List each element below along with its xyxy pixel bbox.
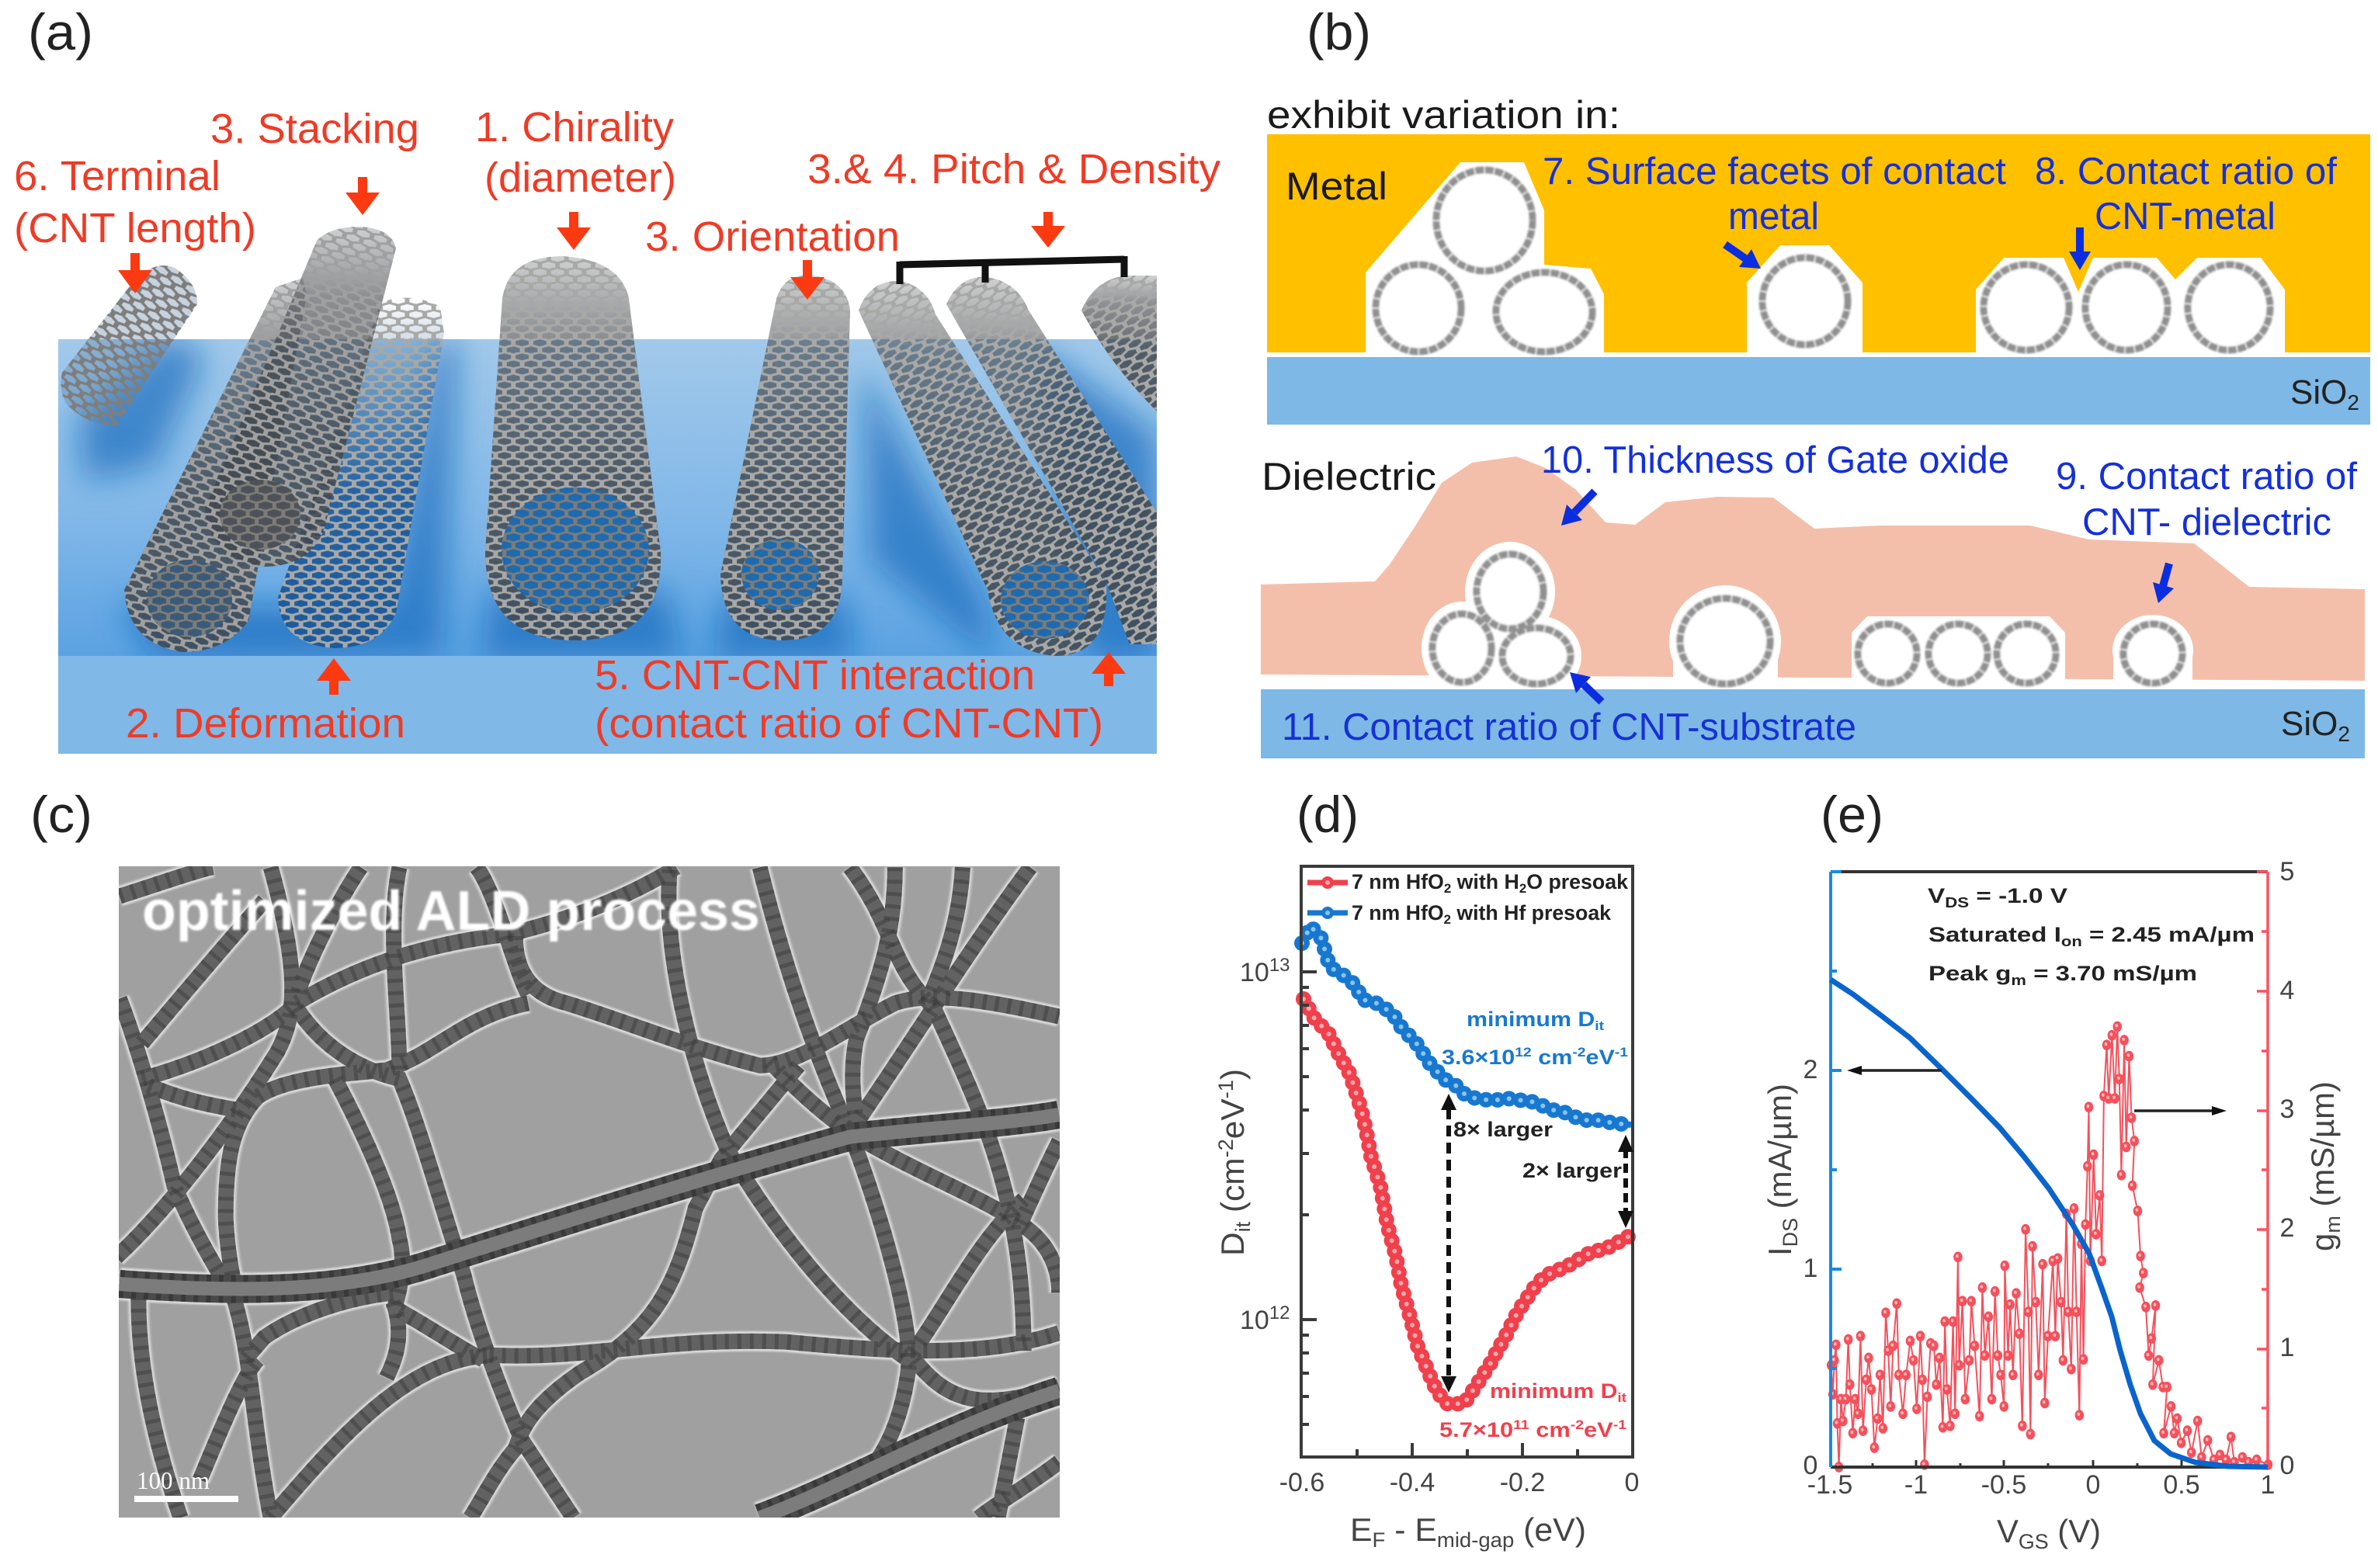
right tick labels: 4 <box>2280 976 2294 1005</box>
tube: chirality large-diameter CNT <box>485 256 661 640</box>
x axis title: F <box>1373 1528 1385 1552</box>
micrograph background <box>119 866 1060 1518</box>
red curve <box>1304 999 1631 1404</box>
blue annotation: -1 <box>1615 1045 1628 1060</box>
panel label: b: (b) <box>1307 3 1371 61</box>
y axis title left: DS <box>1779 1218 1802 1247</box>
measurement annotation: V <box>1928 884 1942 907</box>
panel d: Dit chart <box>1214 866 1639 1552</box>
y axis title left: (mA/µm) <box>1762 1084 1798 1218</box>
panel label: e: (e) <box>1821 786 1883 843</box>
tube: terminal short CNT <box>61 265 197 425</box>
y axis title right: (mS/µm) <box>2304 1081 2341 1216</box>
scale bar: 100 nm <box>137 1466 210 1494</box>
measurement annotation: DS <box>1945 895 1969 911</box>
blue labels dielectric: CNT- dielectric <box>2082 501 2331 543</box>
panel label: d: (d) <box>1297 786 1359 843</box>
dashed arrow 8x: 8× larger <box>1453 1118 1554 1141</box>
left tick labels <box>1803 1055 1817 1480</box>
panel a: nanotube variation illustration <box>14 104 1220 754</box>
red annotation: 11 <box>1513 1417 1529 1432</box>
legend: with H <box>1451 870 1519 893</box>
arrow to left axis <box>1847 1066 1942 1075</box>
x axis title: V <box>1997 1513 2019 1549</box>
legend: 2 <box>1444 881 1451 896</box>
red arrows <box>118 177 1126 695</box>
left tick labels: 0 <box>1803 1451 1817 1480</box>
substrate plane <box>58 334 1157 754</box>
blue labels dielectric: 11. Contact ratio of CNT-substrate <box>1282 706 1856 748</box>
bottom tick labels <box>1807 1470 2275 1500</box>
red annotation: cm <box>1529 1418 1571 1441</box>
red annotation: eV <box>1584 1418 1613 1441</box>
blue curve <box>1302 926 1631 1125</box>
y tick labels: 10 <box>1240 958 1269 987</box>
x tick labels: 0 <box>1625 1468 1639 1497</box>
tube: orientation CNT <box>720 276 850 640</box>
panel label: c: (c) <box>30 786 92 843</box>
measurement annotation: = 2.45 mA/µm <box>2082 923 2255 946</box>
metal SiO2 substrate: 2 <box>2347 390 2359 415</box>
blue labels metal: 8. Contact ratio of <box>2035 151 2337 193</box>
blue labels dielectric <box>1282 439 2357 748</box>
right tick labels: 1 <box>2280 1333 2294 1362</box>
red labels: 2. Deformation <box>126 700 405 747</box>
y tick labels: 12 <box>1269 1303 1290 1323</box>
blue annotation: 3.6×10 <box>1442 1046 1506 1069</box>
y axis title: it <box>1231 1221 1255 1232</box>
blue labels metal <box>1543 151 2337 238</box>
IDS blue curve <box>1831 980 2268 1467</box>
y axis title right: g <box>2304 1233 2341 1251</box>
metal label: Metal <box>1286 165 1387 208</box>
x axis title: (V) <box>2049 1513 2101 1549</box>
left axis blue <box>1831 872 1842 1467</box>
arrow to right axis <box>2134 1106 2227 1115</box>
blue annotation <box>1442 1008 1628 1069</box>
right tick labels: 0 <box>2280 1451 2294 1480</box>
bottom tick labels: 1 <box>2261 1470 2275 1500</box>
y axis title: -2 <box>1214 1139 1238 1157</box>
measurement annotation: = 3.70 mS/µm <box>2026 962 2197 985</box>
tube: right CNT under stack <box>278 298 444 648</box>
x tick labels: -0.6 <box>1279 1468 1324 1497</box>
measurement annotation: = -1.0 V <box>1969 884 2067 907</box>
y tick labels: 10 <box>1240 1306 1269 1335</box>
right axis red <box>2257 872 2268 1467</box>
measurement annotation: Saturated I <box>1928 923 2037 946</box>
blue labels dielectric: 10. Thickness of Gate oxide <box>1541 439 2009 481</box>
right tick labels <box>2280 857 2294 1480</box>
red labels: (CNT length) <box>14 205 256 252</box>
red annotation <box>1439 1379 1626 1441</box>
blue annotation: it <box>1595 1018 1604 1033</box>
blue labels metal: CNT-metal <box>2095 196 2276 238</box>
right tick labels: 3 <box>2280 1094 2294 1124</box>
heading: exhibit variation in: <box>1267 93 1620 137</box>
red labels: 3. Orientation <box>645 213 900 260</box>
dashed arrow 2x <box>1522 1135 1633 1228</box>
x axis title: E <box>1350 1511 1372 1548</box>
red annotation: -2 <box>1571 1417 1584 1432</box>
dielectric layer <box>1261 456 2365 697</box>
x axis title: (eV) <box>1514 1511 1586 1548</box>
panel c: TEM micrograph of nanotube network <box>116 866 1060 1518</box>
red annotation: minimum D <box>1490 1379 1604 1403</box>
y axis title: ) <box>1214 1069 1251 1080</box>
bottom tick labels: -1.5 <box>1807 1470 1852 1500</box>
legend: 7 nm HfO <box>1352 901 1445 924</box>
y tick labels <box>1240 955 1290 1335</box>
y axis title left: I <box>1762 1247 1798 1256</box>
red labels: 6. Terminal <box>14 153 220 199</box>
red labels: (diameter) <box>484 154 676 201</box>
bottom tick labels: -0.5 <box>1981 1470 2026 1500</box>
red annotation: it <box>1617 1390 1626 1405</box>
legend: 2 <box>1519 881 1526 896</box>
metal CNT cross-sections <box>1376 170 2270 352</box>
legend: 2 <box>1444 912 1451 927</box>
blue arrows <box>1561 227 2174 702</box>
y axis title: (cm <box>1214 1157 1251 1222</box>
bottom ticks <box>1873 1460 2225 1467</box>
dielectric SiO2 substrate: 2 <box>2338 722 2350 746</box>
top and bottom axis <box>1831 872 2268 1467</box>
y tick labels: 13 <box>1269 955 1290 976</box>
scale bar <box>134 1473 238 1502</box>
blue annotation: cm <box>1532 1046 1572 1069</box>
legend: O presoak <box>1526 870 1629 893</box>
measurement annotation: on <box>2061 934 2082 949</box>
red labels <box>14 104 1220 747</box>
panel e: transfer characteristics chart <box>1762 857 2345 1553</box>
left tick labels: 1 <box>1803 1254 1817 1283</box>
red labels: 5. CNT-CNT interaction <box>595 652 1035 699</box>
red labels: 1. Chirality <box>475 104 674 151</box>
metal SiO2 substrate: SiO <box>2290 373 2347 411</box>
red annotation: 5.7×10 <box>1439 1418 1504 1441</box>
x axis title: mid-gap <box>1437 1528 1514 1552</box>
measurement annotation <box>1928 884 2255 988</box>
blue labels metal: 7. Surface facets of contact <box>1543 151 2006 193</box>
metal SiO2 substrate <box>1267 357 2370 425</box>
measurement annotation: m <box>2011 973 2026 988</box>
legend <box>1307 870 1629 927</box>
blue annotation: -2 <box>1572 1045 1586 1060</box>
legend: 7 nm HfO <box>1352 870 1445 893</box>
red labels: 3.& 4. Pitch & Density <box>807 146 1220 193</box>
x tick labels: -0.4 <box>1390 1468 1435 1497</box>
x axis title: - E <box>1385 1511 1437 1548</box>
tube: stacked CNT <box>205 227 396 567</box>
y axis title: D <box>1214 1233 1251 1256</box>
panel label: a: (a) <box>28 3 93 61</box>
red labels: (contact ratio of CNT-CNT) <box>595 700 1103 747</box>
y axis title: eV <box>1214 1098 1251 1139</box>
measurement annotation: Peak g <box>1928 962 1996 985</box>
dashed arrow 2x: 2× larger <box>1522 1159 1623 1182</box>
bottom tick labels: 0 <box>2086 1470 2100 1500</box>
tube: deformed left CNT <box>124 278 307 652</box>
panel b: metal and dielectric contact schematic <box>1261 93 2370 758</box>
blue labels metal: metal <box>1728 196 1819 238</box>
x tick labels <box>1279 1468 1639 1497</box>
dashed arrow 8x <box>1441 1094 1554 1393</box>
axes frame and ticks <box>1301 866 1633 1457</box>
blue labels dielectric: 9. Contact ratio of <box>2056 456 2357 498</box>
legend: with Hf presoak <box>1451 901 1612 924</box>
bottom tick labels: -1 <box>1904 1470 1928 1500</box>
dielectric label: Dielectric <box>1262 455 1436 498</box>
dielectric SiO2 substrate <box>1261 689 2365 758</box>
left tick labels: 2 <box>1803 1055 1817 1084</box>
nanotube network <box>116 867 1059 1518</box>
dielectric SiO2 substrate: SiO <box>2281 705 2338 743</box>
tubes: pitch and density CNT array <box>859 276 1157 656</box>
gm noisy red data <box>1831 1026 2268 1467</box>
pitch bracket <box>900 256 1124 284</box>
x axis title: GS <box>2019 1530 2049 1553</box>
metal layer <box>1267 134 2370 352</box>
right tick labels: 5 <box>2280 857 2294 886</box>
y axis title: -1 <box>1214 1080 1238 1098</box>
red annotation: -1 <box>1613 1417 1626 1432</box>
bottom tick labels: 0.5 <box>2163 1470 2200 1500</box>
micrograph title: optimized ALD process <box>142 880 760 942</box>
right tick labels: 2 <box>2280 1213 2294 1243</box>
dielectric CNT cross-sections <box>1432 554 2182 684</box>
blue annotation: minimum D <box>1467 1008 1581 1031</box>
blue annotation: 12 <box>1515 1045 1532 1060</box>
blue annotation: eV <box>1586 1046 1615 1069</box>
y axis title right: m <box>2321 1216 2345 1233</box>
red labels: 3. Stacking <box>210 106 419 152</box>
x tick labels: -0.2 <box>1500 1468 1545 1497</box>
